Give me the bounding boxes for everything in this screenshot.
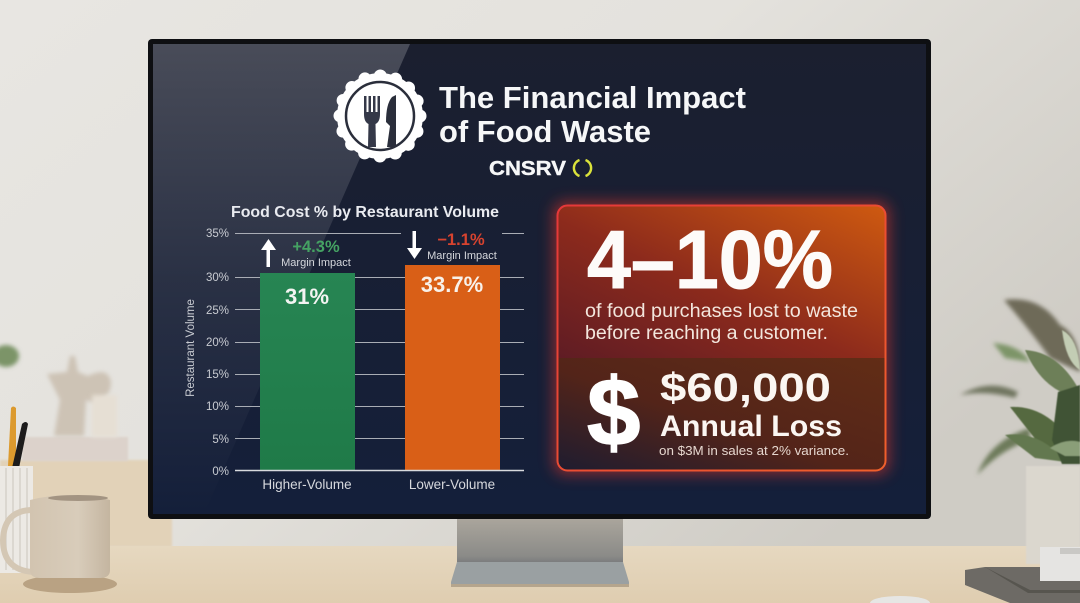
potted plant <box>1005 330 1080 564</box>
margin impact: -1.1%: Margin Impact <box>427 250 497 262</box>
margin impact: +4.3%: Margin Impact <box>281 257 351 269</box>
monitor stand <box>451 519 629 587</box>
annual loss amount: $60,000 <box>660 366 831 410</box>
x axis labels: Higher-Volume <box>262 477 352 492</box>
y axis labels: 25% <box>206 305 229 317</box>
blurred plant shadow on wall <box>960 299 1080 475</box>
y axis labels: 20% <box>206 337 229 349</box>
margin impact: -1.1%: −1.1% <box>437 231 485 249</box>
value: 31%: 31% <box>285 284 329 309</box>
y axis labels: 5% <box>212 434 229 446</box>
monitor screen <box>153 44 926 514</box>
title: of Food Waste <box>439 114 651 149</box>
icon: up arrow <box>261 239 276 267</box>
y axis labels: 30% <box>206 272 229 284</box>
icon: fork <box>364 96 380 147</box>
x axis labels <box>262 477 495 492</box>
annual loss label: Annual Loss <box>660 410 842 443</box>
monitor bezel <box>148 39 931 519</box>
mouse on desk <box>870 596 930 603</box>
logo: CNSRV: CNSRV <box>489 158 567 180</box>
y axis labels: 15% <box>206 369 229 381</box>
coffee mug on coaster <box>3 495 117 593</box>
big stat: 4–10% <box>587 213 833 306</box>
bar chart: food cost by volume <box>185 204 524 492</box>
pen cup with pencil and pen <box>0 406 33 573</box>
value: 33.7%: 33.7% <box>421 272 483 297</box>
bar: lower-volume <box>405 265 500 470</box>
logo: CNSRV <box>489 158 591 180</box>
margin impact: -1.1% <box>427 231 497 262</box>
stat description: of food purchases lost to waste <box>585 301 858 322</box>
desk surface <box>0 546 1080 603</box>
bar: higher-volume <box>260 273 355 470</box>
title: The Financial Impact <box>439 80 746 115</box>
screen glare <box>153 44 410 407</box>
annual loss note: on $3M in sales at 2% variance. <box>659 443 849 458</box>
header badge icon: fork and knife <box>337 73 423 159</box>
icon: knife <box>386 95 396 147</box>
stat description: before reaching a customer. <box>585 323 828 344</box>
blurred sideboard with books and moka pot <box>0 345 172 547</box>
y axis labels: 10% <box>206 401 229 413</box>
notebook and white box <box>965 547 1080 603</box>
panel: waste stat card <box>557 205 886 471</box>
y axis labels <box>206 228 229 478</box>
margin impact: +4.3%: +4.3% <box>292 238 340 256</box>
chart title: Food Cost % by Restaurant Volume <box>231 204 499 221</box>
icon: dollar sign: $ <box>587 359 640 466</box>
y axis labels: 0% <box>212 466 229 478</box>
x axis labels: Lower-Volume <box>409 477 495 492</box>
margin impact: +4.3% <box>281 238 351 269</box>
glow behind stat card <box>553 201 890 475</box>
icon: down arrow <box>407 231 422 259</box>
y axis title: Restaurant Volume <box>185 299 197 397</box>
y axis labels: 35% <box>206 228 229 240</box>
